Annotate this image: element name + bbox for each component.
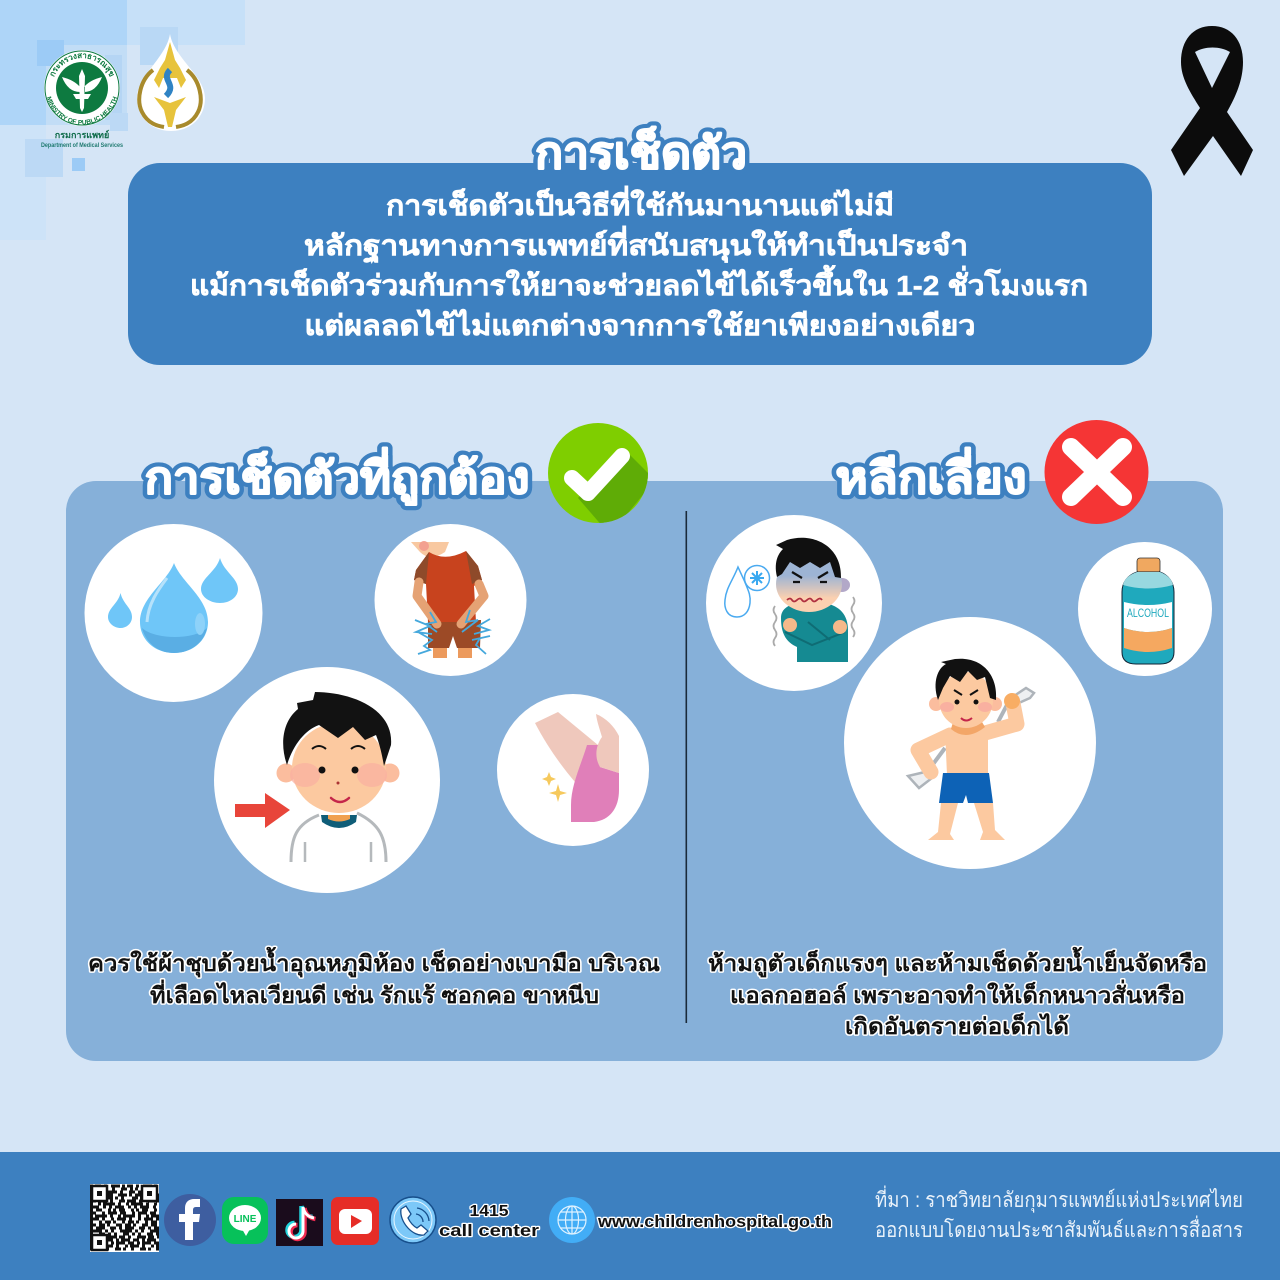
text block: intro text: แต่ผลลดไข้ไม่แตกต่างจากการใช้ยาเพียงอย่างเดียว bbox=[304, 309, 976, 341]
icon: TikTok bbox=[276, 1199, 323, 1246]
logo: Ministry of Public Health: MINISTRY OF PUBLIC HEALTH bbox=[46, 96, 118, 124]
text block: intro text: การเช็ดตัวเป็นวิธีที่ใช้กันมานานแต่ไม่มี bbox=[386, 185, 894, 221]
website url: www.childrenhospital.go.th bbox=[597, 1213, 832, 1231]
heading: avoid: หลีกเลี่ยง bbox=[836, 447, 1026, 503]
heading: main title: การเช็ดตัว bbox=[535, 126, 747, 178]
source credit: ที่มา : ราชวิทยาลัยกุมารแพทย์แห่งประเทศไทย bbox=[875, 1185, 1243, 1213]
text block: what to avoid: แอลกอฮอล์ เพราะอาจทำให้เด็กหนาวสั่นหรือ bbox=[730, 979, 1185, 1008]
icon: globe bbox=[549, 1197, 595, 1243]
icon: black mourning ribbon bbox=[1171, 26, 1253, 176]
call center text bbox=[439, 1203, 540, 1240]
illustration: child with groin highlighted bbox=[374, 524, 526, 676]
source credit: ออกแบบโดยงานประชาสัมพันธ์และการสื่อสาร bbox=[875, 1215, 1243, 1242]
heading: avoid: หลีกเลี่ยง bbox=[836, 447, 1026, 503]
text block: correct sponging advice: ที่เลือดไหลเวียนดี เช่น รักแร้ ซอกคอ ขาหนีบ bbox=[150, 979, 599, 1008]
QR code bbox=[90, 1184, 159, 1252]
footer bar bbox=[0, 1152, 1280, 1280]
icon: green check bbox=[548, 423, 648, 523]
illustration: alcohol bottle bbox=[1078, 542, 1212, 676]
logo: Ministry of Public Health: กรมการแพทย์ bbox=[55, 129, 109, 140]
logo: Ministry of Public Health: Department of Medical Services bbox=[41, 142, 123, 149]
logo: Ministry of Public Health bbox=[41, 50, 123, 149]
icon: LINE bbox=[222, 1197, 268, 1244]
text block: what to avoid: ห้ามถูตัวเด็กแรงๆ และห้ามเช็ดด้วยน้ำเย็นจัดหรือ bbox=[708, 946, 1207, 978]
logo: Children's hospital drop bbox=[137, 34, 205, 131]
panel: comparison background bbox=[66, 481, 1223, 1061]
heading: correct sponging: การเช็ดตัวที่ถูกต้อง bbox=[144, 447, 530, 505]
illustration: shivering child bbox=[706, 515, 882, 691]
illustration: alcohol bottle: ALCOHOL bbox=[1127, 606, 1169, 620]
heading: main title: การเช็ดตัว bbox=[535, 126, 747, 178]
icon: YouTube bbox=[331, 1197, 379, 1245]
text block: intro text bbox=[190, 185, 1088, 341]
icon: red cross bbox=[1044, 420, 1148, 524]
text block: correct sponging advice: ควรใช้ผ้าชุบด้วยน้ำอุณหภูมิห้อง เช็ดอย่างเบามือ บริเวณ bbox=[88, 946, 660, 978]
text block: what to avoid: เกิดอันตรายต่อเด็กได้ bbox=[845, 1012, 1069, 1039]
text block: intro text: หลักฐานทางการแพทย์ที่สนับสนุนให้ทำเป็นประจำ bbox=[304, 225, 968, 264]
source credit bbox=[875, 1185, 1243, 1242]
text block: intro text: แม้การเช็ดตัวร่วมกับการให้ยาจะช่วยลดไข้ได้เร็วขึ้นใน 1-2 ชั่วโมงแรก bbox=[190, 264, 1088, 301]
text block: correct sponging advice bbox=[88, 946, 660, 1008]
illustration: boy rubbing with towel bbox=[844, 617, 1096, 869]
icon: facebook bbox=[164, 1194, 216, 1246]
illustration: water drops bbox=[84, 524, 262, 702]
heading: correct sponging: การเช็ดตัวที่ถูกต้อง bbox=[144, 447, 530, 505]
call center text: call center bbox=[439, 1222, 540, 1240]
illustration: boy with neck arrow bbox=[214, 667, 440, 893]
panel: intro bbox=[128, 126, 1152, 365]
icon: phone bbox=[390, 1197, 436, 1243]
text block: what to avoid bbox=[708, 946, 1207, 1039]
call center text: 1415 bbox=[470, 1203, 509, 1220]
logo: Ministry of Public Health: กระทรวงสาธารณสุข bbox=[50, 53, 114, 77]
icon: LINE: LINE bbox=[234, 1214, 257, 1225]
illustration: clean armpit bbox=[497, 694, 649, 846]
